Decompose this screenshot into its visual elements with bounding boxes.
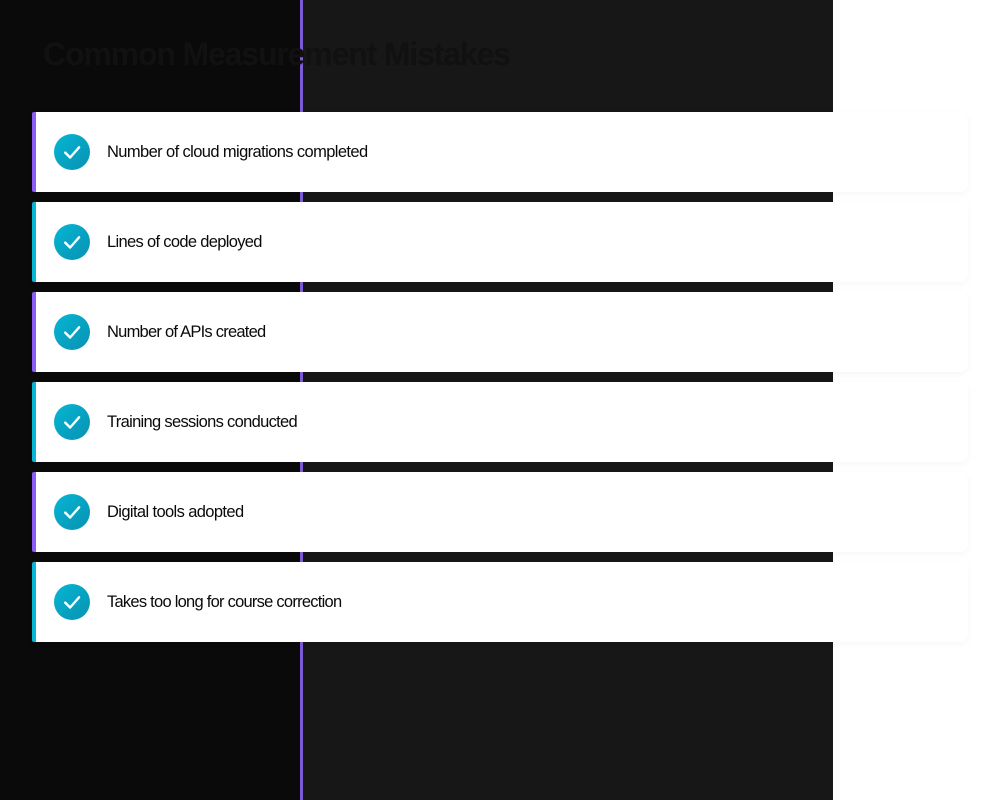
- icon: check: [54, 224, 90, 260]
- icon: check: [54, 134, 90, 170]
- background: dark left panel: [0, 0, 300, 800]
- card: lines of code: [32, 202, 968, 282]
- icon: check: [54, 584, 90, 620]
- icon: check: [54, 404, 90, 440]
- label: Training sessions conducted: [107, 413, 297, 431]
- vertical purple line: [300, 0, 303, 800]
- label: Digital tools adopted: [107, 503, 244, 521]
- card: APIs: [32, 292, 968, 372]
- card: training: [32, 382, 968, 462]
- label: Lines of code deployed: [107, 233, 262, 251]
- icon: check: [54, 494, 90, 530]
- card: digital tools: [32, 472, 968, 552]
- background: dark right panel: [303, 0, 833, 800]
- title: Common Measurement Mistakes: [43, 36, 510, 72]
- label: Takes too long for course correction: [107, 593, 341, 611]
- card: course correction: [32, 562, 968, 642]
- label: Number of cloud migrations completed: [107, 143, 368, 161]
- icon: check: [54, 314, 90, 350]
- card: cloud migrations: [32, 112, 968, 192]
- label: Number of APIs created: [107, 323, 265, 341]
